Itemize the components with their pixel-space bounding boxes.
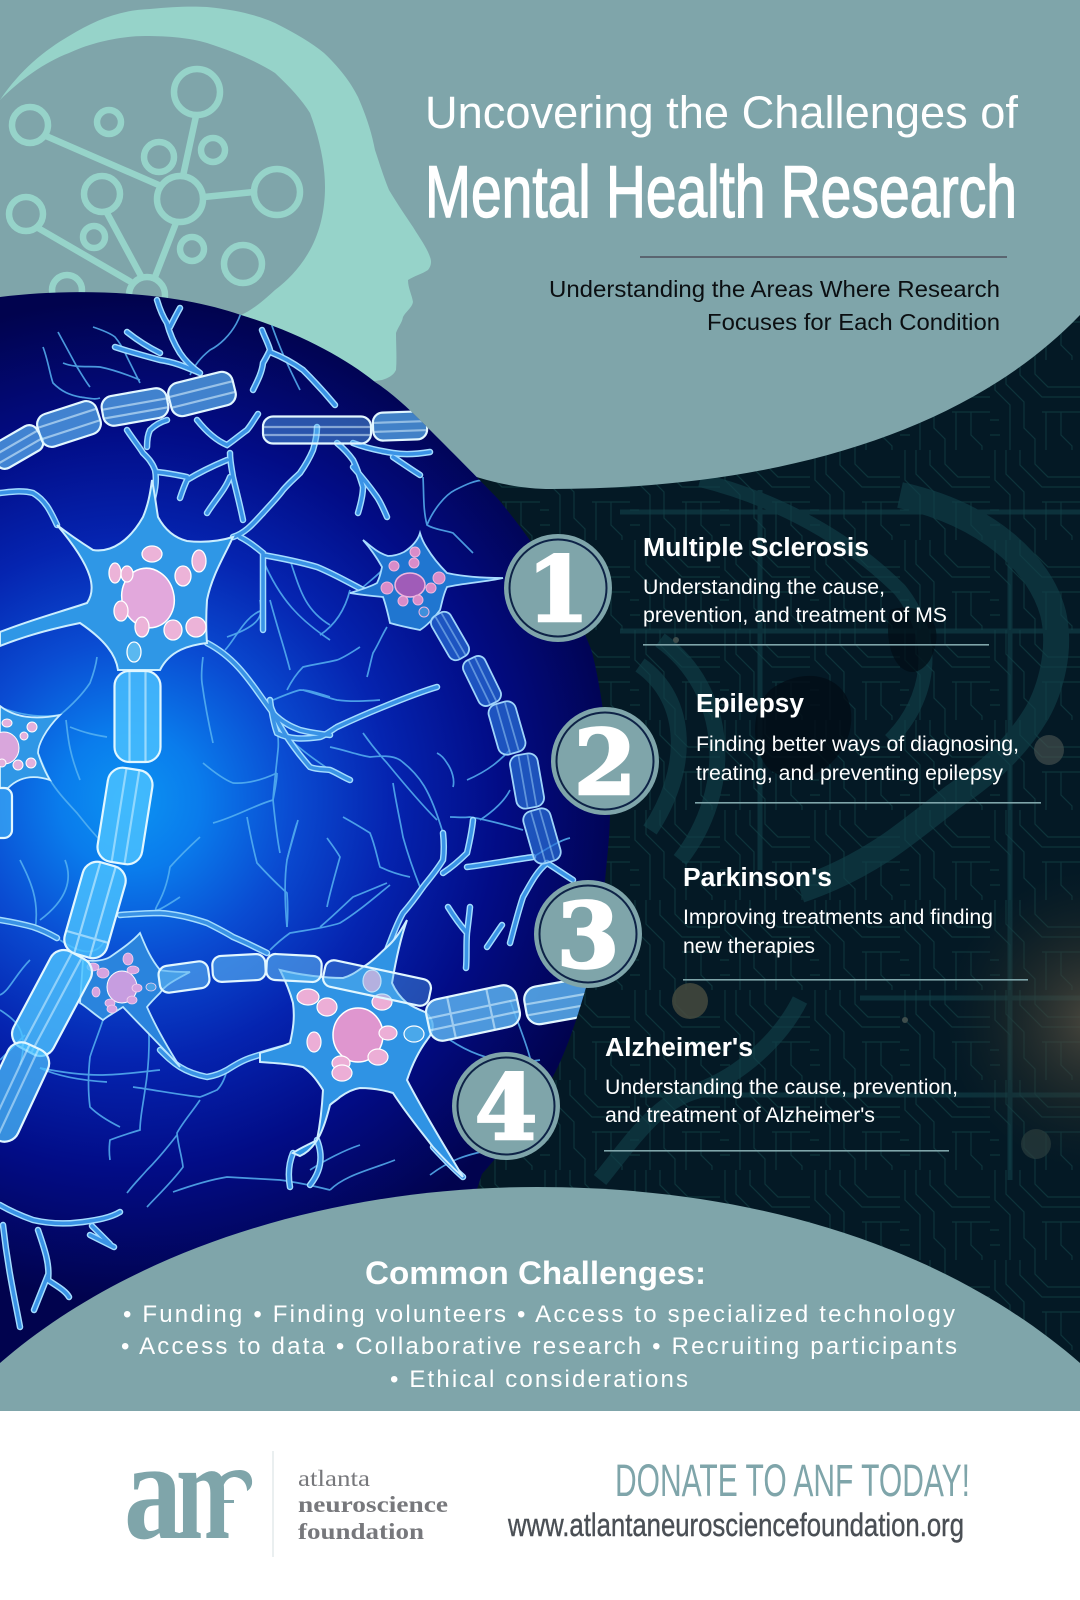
logo wordmark: foundation <box>298 1519 424 1544</box>
challenges list: • Funding • Finding volunteers • Access to specialized technology <box>123 1301 955 1328</box>
neuron C <box>0 706 60 788</box>
number badge 3: 3 <box>557 883 619 989</box>
neuron D <box>80 933 190 1067</box>
challenges list: • Ethical considerations <box>390 1366 688 1393</box>
text: epilepsy <box>696 690 1019 785</box>
subtitle <box>549 276 1000 335</box>
text: parkinson's: new therapies <box>683 935 815 958</box>
left vertical chain <box>0 671 161 1147</box>
number badge 1: 1 <box>527 537 589 643</box>
text: multiple sclerosis: Understanding the cause, <box>643 576 885 599</box>
subtitle: Understanding the Areas Where Research <box>549 276 1000 302</box>
number badge 1 <box>504 534 612 643</box>
item 1: multiple sclerosis <box>504 534 989 646</box>
neuron A <box>0 480 233 670</box>
website url: www.atlantaneurosciencefoundation.org <box>507 1507 964 1543</box>
logo wordmark <box>298 1466 448 1544</box>
challenges list <box>121 1301 957 1393</box>
item 3: parkinson's <box>534 864 1028 989</box>
text: multiple sclerosis: Multiple Sclerosis <box>643 534 869 562</box>
panel: top teal header wave <box>0 0 1080 489</box>
neuron E <box>260 920 463 1177</box>
axon capsule chains <box>0 370 592 1147</box>
panel: common challenges arch <box>0 1187 1080 1411</box>
logo wordmark: neuroscience <box>298 1492 448 1517</box>
logo: anf mark: a <box>124 1411 182 1569</box>
number badge 3 <box>534 880 642 989</box>
title: Uncovering the Challenges of <box>425 87 1018 138</box>
item 4: alzheimer's <box>452 1034 958 1161</box>
heading: common challenges: Common Challenges: <box>365 1255 706 1291</box>
text: alzheimer's: Understanding the cause, prevention, <box>605 1076 958 1099</box>
panel: neuron illustration <box>0 292 610 1363</box>
logo divider <box>272 1451 274 1557</box>
challenges list: • Access to data • Collaborative research • Recruiting participants <box>121 1333 957 1360</box>
thicker dendrite branches <box>0 300 573 1327</box>
text: epilepsy: Finding better ways of diagnosing, <box>696 733 1019 756</box>
divider under title <box>640 256 1007 258</box>
text: parkinson's <box>683 864 993 958</box>
icon: head silhouette with neural network <box>0 7 431 400</box>
number badge 2: 2 <box>574 710 636 816</box>
text: parkinson's: Parkinson's <box>683 864 832 892</box>
neuron B <box>350 533 503 630</box>
text: parkinson's: Improving treatments and finding <box>683 906 993 929</box>
text: alzheimer's <box>605 1034 958 1127</box>
number badge 2 <box>551 707 659 816</box>
text: epilepsy: Epilepsy <box>696 690 805 718</box>
subtitle: Focuses for Each Condition <box>707 309 1000 335</box>
logo: anf mark: n <box>176 1411 230 1569</box>
bottom chain <box>157 954 592 1043</box>
text: multiple sclerosis: prevention, and treatment of MS <box>643 604 947 627</box>
item 2: epilepsy <box>551 690 1041 816</box>
text: alzheimer's: and treatment of Alzheimer's <box>605 1104 875 1127</box>
footer white band <box>0 1411 1080 1600</box>
right chain <box>428 609 563 866</box>
text: epilepsy: treating, and preventing epilepsy <box>696 762 1003 785</box>
text: multiple sclerosis <box>643 534 947 627</box>
number badge 4: 4 <box>475 1055 537 1161</box>
top chain <box>0 370 427 472</box>
title <box>425 87 1018 233</box>
logo wordmark: atlanta <box>298 1466 370 1491</box>
text: alzheimer's: Alzheimer's <box>605 1034 753 1062</box>
number badge 4 <box>452 1052 560 1161</box>
logo: anf mark <box>124 1411 252 1569</box>
thin dendrite network <box>0 290 570 1207</box>
